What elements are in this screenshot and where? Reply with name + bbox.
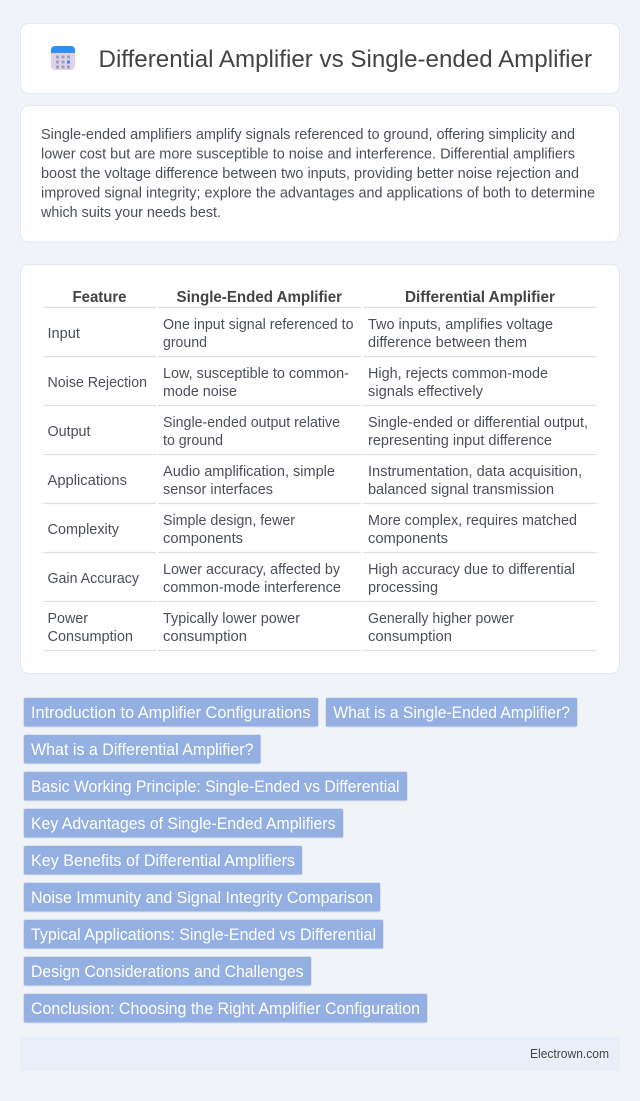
- title: Differential Amplifier vs Single-ended Amplifier: [98, 46, 592, 73]
- header panel: [20, 24, 620, 94]
- tag: benefits: Key Benefits of Differential Amplifiers: [31, 852, 295, 870]
- tag: design: [24, 956, 312, 986]
- row: complexity: Complexity: [48, 521, 119, 538]
- row: output: representing input difference: [368, 432, 552, 449]
- topic tags: [24, 698, 578, 1023]
- tag: applications: [24, 920, 384, 949]
- row: applications: [48, 463, 582, 498]
- table header: Feature: [72, 289, 127, 306]
- tag: advantages: [24, 808, 344, 838]
- intro text: which suits your needs best.: [40, 204, 221, 221]
- intro text: Single-ended amplifiers amplify signals referenced to ground, offering simplicity and: [41, 126, 575, 143]
- row: power consumption: Consumption: [48, 628, 133, 645]
- row: input: Input: [48, 325, 81, 342]
- tag: working principle: Basic Working Principle: Single-Ended vs Differential: [31, 778, 400, 796]
- tag: differential: What is a Differential Amplifier?: [31, 741, 254, 759]
- tag: applications: Typical Applications: Single-Ended vs Differential: [31, 926, 376, 944]
- row: power consumption: Typically lower power: [163, 610, 300, 627]
- row: power consumption: Generally higher power: [368, 610, 514, 627]
- table header: [72, 289, 555, 306]
- table header: Differential Amplifier: [405, 289, 555, 306]
- tag: introduction: [24, 698, 318, 727]
- tag: advantages: Key Advantages of Single-Ended Amplifiers: [31, 815, 336, 833]
- tag: conclusion: [24, 994, 428, 1023]
- row: output: Single-ended or differential output,: [368, 414, 588, 431]
- panel: comparison table: [20, 264, 620, 674]
- row: complexity: components: [163, 530, 243, 547]
- footer: [20, 1037, 620, 1071]
- row: noise rejection: High, rejects common-mode: [368, 365, 548, 382]
- row: input: ground: [163, 334, 207, 351]
- row: complexity: Simple design, fewer: [163, 512, 295, 529]
- footer: Electrown.com: [530, 1046, 609, 1061]
- row: power consumption: [48, 610, 514, 645]
- row: output: Output: [48, 423, 91, 440]
- row: noise rejection: [48, 365, 548, 400]
- tag: single-ended: [326, 698, 578, 727]
- row: input: [48, 316, 553, 351]
- row: complexity: components: [368, 530, 448, 547]
- row: output: to ground: [163, 432, 223, 449]
- row: noise rejection: Low, susceptible to common-: [163, 365, 349, 382]
- row: output: Single-ended output relative: [163, 414, 340, 431]
- row: noise rejection: signals effectively: [368, 383, 483, 400]
- row: input: difference between them: [368, 334, 527, 351]
- tag: introduction: Introduction to Amplifier Configurations: [31, 704, 310, 722]
- row: complexity: More complex, requires matched: [368, 512, 577, 529]
- row: applications: sensor interfaces: [163, 481, 273, 498]
- intro text: [40, 126, 595, 221]
- row: applications: balanced signal transmission: [368, 481, 554, 498]
- row: power consumption: Power: [48, 610, 88, 627]
- row: input: Two inputs, amplifies voltage: [368, 316, 553, 333]
- row: complexity: [48, 512, 577, 547]
- table header: Single-Ended Amplifier: [176, 289, 342, 306]
- row: gain accuracy: processing: [368, 579, 438, 596]
- panel: introduction: [20, 106, 620, 242]
- tag: differential: [24, 734, 261, 764]
- row: power consumption: consumption: [163, 628, 247, 645]
- row: applications: Instrumentation, data acquisition,: [368, 463, 582, 480]
- row: gain accuracy: [48, 561, 575, 596]
- row: input: One input signal referenced to: [163, 316, 354, 333]
- tag: noise immunity: Noise Immunity and Signal Integrity Comparison: [31, 889, 373, 907]
- icon: calendar grid: [51, 46, 75, 70]
- intro text: lower cost but are more susceptible to noise and interference. Differential amplifiers: [41, 146, 575, 162]
- row: gain accuracy: High accuracy due to differential: [368, 561, 575, 578]
- row: noise rejection: Noise Rejection: [48, 374, 147, 391]
- tag: single-ended: What is a Single-Ended Amplifier?: [333, 704, 570, 722]
- row: applications: Audio amplification, simple: [163, 463, 335, 480]
- row: output: [48, 414, 588, 449]
- row: gain accuracy: Lower accuracy, affected by: [163, 561, 340, 578]
- intro text: improved signal integrity; explore the advantages and applications of both to determine: [41, 184, 595, 202]
- row: applications: Applications: [48, 472, 127, 489]
- row: noise rejection: mode noise: [163, 383, 237, 400]
- intro text: boost the voltage difference between two inputs, providing better noise rejection and: [41, 165, 579, 182]
- tag: working principle: [24, 772, 408, 801]
- tag: benefits: [24, 846, 302, 875]
- row: gain accuracy: common-mode interference: [163, 579, 341, 596]
- row: power consumption: consumption: [368, 628, 452, 645]
- tag: conclusion: Conclusion: Choosing the Right Amplifier Configuration: [31, 1000, 420, 1018]
- tag: noise immunity: [24, 882, 380, 912]
- tag: design: Design Considerations and Challenges: [31, 963, 304, 981]
- row: gain accuracy: Gain Accuracy: [48, 570, 139, 587]
